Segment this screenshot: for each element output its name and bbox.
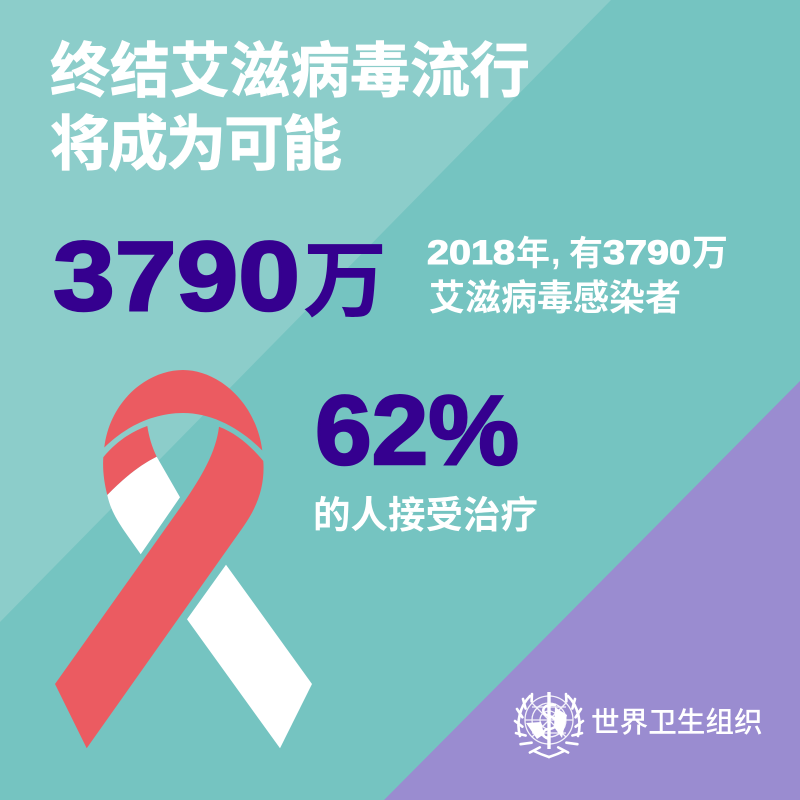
emblem staff and serpent [543, 692, 557, 749]
emblem wreath right [549, 694, 583, 757]
title [50, 38, 530, 178]
description: people living with HIV in 2018: 2018 [427, 234, 515, 272]
ribbon top arc [104, 370, 262, 450]
WHO name: 世界卫生组织 [591, 707, 763, 739]
WHO logo [515, 692, 763, 757]
description: people living with HIV in 2018 [427, 232, 728, 318]
ribbon left white loop [107, 457, 180, 554]
description: people living with HIV in 2018: 有 [569, 235, 603, 273]
description: people living with HIV in 2018: 艾滋病毒感染者 [429, 277, 681, 318]
big number: 37.9 million [53, 221, 387, 331]
ribbon left red loop [103, 426, 157, 495]
title: 终结艾滋病毒流行 [50, 38, 530, 105]
description: people living with HIV in 2018: 年 [516, 235, 550, 273]
icon: red and white ribbon [55, 370, 312, 748]
caption: receiving treatment: 的人接受治疗 [313, 494, 538, 536]
description: people living with HIV in 2018: 万 [692, 232, 728, 273]
description: people living with HIV in 2018: 3790 [603, 234, 691, 272]
emblem continents [526, 707, 567, 739]
ribbon white tail [187, 565, 312, 748]
background: light teal diagonal [0, 0, 611, 622]
WHO emblem [515, 692, 583, 757]
background: purple corner [384, 381, 800, 800]
ribbon red band [55, 427, 264, 748]
description: people living with HIV in 2018: , [551, 234, 560, 272]
statistic: 62%: 62% [315, 375, 519, 485]
emblem wreath left [515, 694, 549, 757]
title: 将成为可能 [50, 111, 342, 178]
big number: 37.9 million: 万 [303, 234, 387, 328]
emblem globe [525, 696, 573, 744]
big number: 37.9 million: 3790 [53, 221, 300, 331]
